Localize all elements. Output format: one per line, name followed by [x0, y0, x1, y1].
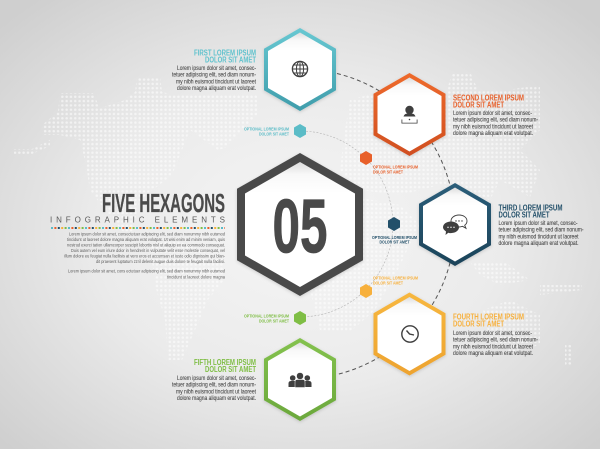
hexagon 1: teal: [264, 28, 336, 111]
coloured dotted divider: [51, 227, 225, 229]
text block: third: DOLOR SIT AMET: [498, 210, 550, 220]
outer dashed connector arc: [337, 74, 455, 374]
text block: second: tetuer adipiscing elit, sed diam nonum-: [453, 117, 538, 124]
hexagon 4: yellow: [374, 292, 446, 376]
small label: first: [244, 127, 289, 138]
text block: first: tetuer adipiscing elit, sed diam nonum-: [172, 72, 256, 79]
text block: second: [453, 94, 538, 137]
text block: fourth: Lorem ipsum dolor sit amet, consec-: [453, 330, 532, 337]
small hexagon: fifth: [294, 311, 306, 325]
text block: fifth: FIFTH LOREM IPSUM: [194, 358, 256, 367]
text block: fifth: tetuer adipiscing elit, sed diam nonum-: [172, 382, 256, 389]
title: FIVE HEXAGONS: [102, 188, 225, 218]
hexagon 5: green: [264, 338, 336, 421]
icon: clock: [402, 326, 418, 342]
intro paragraphs: [64, 232, 226, 280]
text block: second: dolore magna aliquam erat volutpat.: [453, 130, 533, 137]
small label: first: OPTIONAL LOREM IPSUM: [244, 127, 289, 133]
small label: fourth: OPTIONAL LOREM IPSUM: [373, 276, 418, 282]
small label: fourth: DOLOR SIT AMET: [373, 281, 403, 287]
text block: fourth: FOURTH LOREM IPSUM: [453, 312, 524, 322]
text block: fifth: dolore magna aliquam erat volutpat.: [177, 395, 256, 402]
intro paragraphs: Duis autem vel eum iriure dolor in hendrerit in vulputate velit esse molestie consequat, vel: [71, 248, 225, 253]
text block: fifth: [172, 358, 256, 402]
text block: fourth: tetuer adipiscing elit, sed diam nonum-: [453, 337, 538, 344]
text block: first: [172, 48, 256, 92]
text block: fifth: my nibh euismod tincidunt ut laoreet: [176, 388, 256, 395]
intro paragraphs: Lorem ipsum dolor sit amet, consectetuer adipiscing elit, sed diam nonummy nibh euismod: [69, 232, 225, 236]
text block: third: THIRD LOREM IPSUM: [498, 204, 563, 212]
text block: third: my nibh euismod tincidunt ut laoreet: [498, 233, 579, 240]
text block: fourth: dolore magna aliquam erat volutpat.: [453, 350, 533, 357]
text block: second: Lorem ipsum dolor sit amet, consec-: [453, 110, 532, 117]
small label: third: DOLOR SIT AMET: [380, 239, 410, 245]
small label: third: OPTIONAL LOREM IPSUM: [372, 235, 417, 241]
inner thin dashed arc: [306, 131, 393, 317]
text block: first: DOLOR SIT AMET: [205, 56, 256, 64]
small hexagon: second: [360, 151, 372, 165]
small label: third: [372, 235, 417, 245]
intro paragraphs: illum dolore eu feugiat nulla facilisis at vero eros et accumsan et iusto odio dignissim qui blan-: [64, 254, 225, 258]
text block: fifth: Lorem ipsum dolor sit amet, consec-: [177, 375, 256, 382]
small hexagon: first: [294, 124, 306, 138]
text block: first: FIRST LOREM IPSUM: [194, 48, 256, 58]
text block: fifth: DOLOR SIT AMET: [205, 365, 256, 374]
icon: user at desk: [401, 106, 417, 124]
small label: fifth: DOLOR SIT AMET: [259, 319, 289, 325]
text block: second: DOLOR SIT AMET: [453, 100, 504, 110]
text block: third: Lorem ipsum dolor sit amet, consec-: [498, 220, 578, 227]
small label: fifth: [244, 314, 289, 325]
small label: second: [373, 165, 418, 176]
text block: first: my nibh euismod tincidunt ut laoreet: [176, 78, 256, 85]
text block: fourth: DOLOR SIT AMET: [453, 320, 504, 328]
text block: third: dolore magna aliquam erat volutpat.: [498, 240, 579, 247]
icon: people: [288, 372, 312, 388]
small label: first: DOLOR SIT AMET: [259, 132, 289, 138]
text block: first: Lorem ipsum dolor sit amet, consec-: [177, 65, 256, 72]
small hexagon: fourth: [360, 284, 372, 298]
dotted world map: [14, 72, 582, 365]
hexagon 3: navy: [419, 183, 491, 266]
hexagon 2: orange: [374, 73, 446, 156]
intro paragraphs: nostrud exerci tation ullamcorper suscipit lobortis nisl ut aliquip ex ea commodo consequat.: [67, 242, 225, 248]
text block: first: dolore magna aliquam erat volutpat.: [177, 85, 256, 92]
intro paragraphs: tincidunt ut laoreet dolore magna aliquam erat volutpat. Ut wisi enim ad minim veniam, quis: [67, 237, 226, 242]
small label: second: DOLOR SIT AMET: [373, 170, 403, 176]
icon: chat bubbles: [443, 215, 467, 235]
small label: second: OPTIONAL LOREM IPSUM: [373, 165, 418, 171]
text block: second: SECOND LOREM IPSUM: [453, 94, 524, 102]
number: 05: [272, 184, 328, 270]
central hexagon: [237, 153, 363, 296]
intro paragraphs: tincidunt ut laoreet dolore magna: [167, 274, 225, 280]
icon: globe: [292, 61, 308, 77]
small label: fourth: [373, 276, 418, 287]
small hexagon: third: [388, 217, 400, 231]
text block: third: [498, 204, 584, 247]
subtitle: INFOGRAPHIC ELEMENTS: [50, 216, 225, 224]
intro paragraphs: Lorem ipsum dolor sit amet, cons ectetuer adipiscing elit, sed diam nonummy nibh euismod: [68, 268, 225, 274]
small label: fifth: OPTIONAL LOREM IPSUM: [244, 314, 289, 320]
intro paragraphs: dit praesent luptatum zzril delenit augue duis dolore te feugait nulla facilisi.: [96, 259, 225, 264]
text block: second: my nibh euismod tincidunt ut laoreet: [453, 123, 533, 130]
text block: fourth: [453, 312, 538, 357]
text block: fourth: my nibh euismod tincidunt ut laoreet: [453, 343, 533, 350]
